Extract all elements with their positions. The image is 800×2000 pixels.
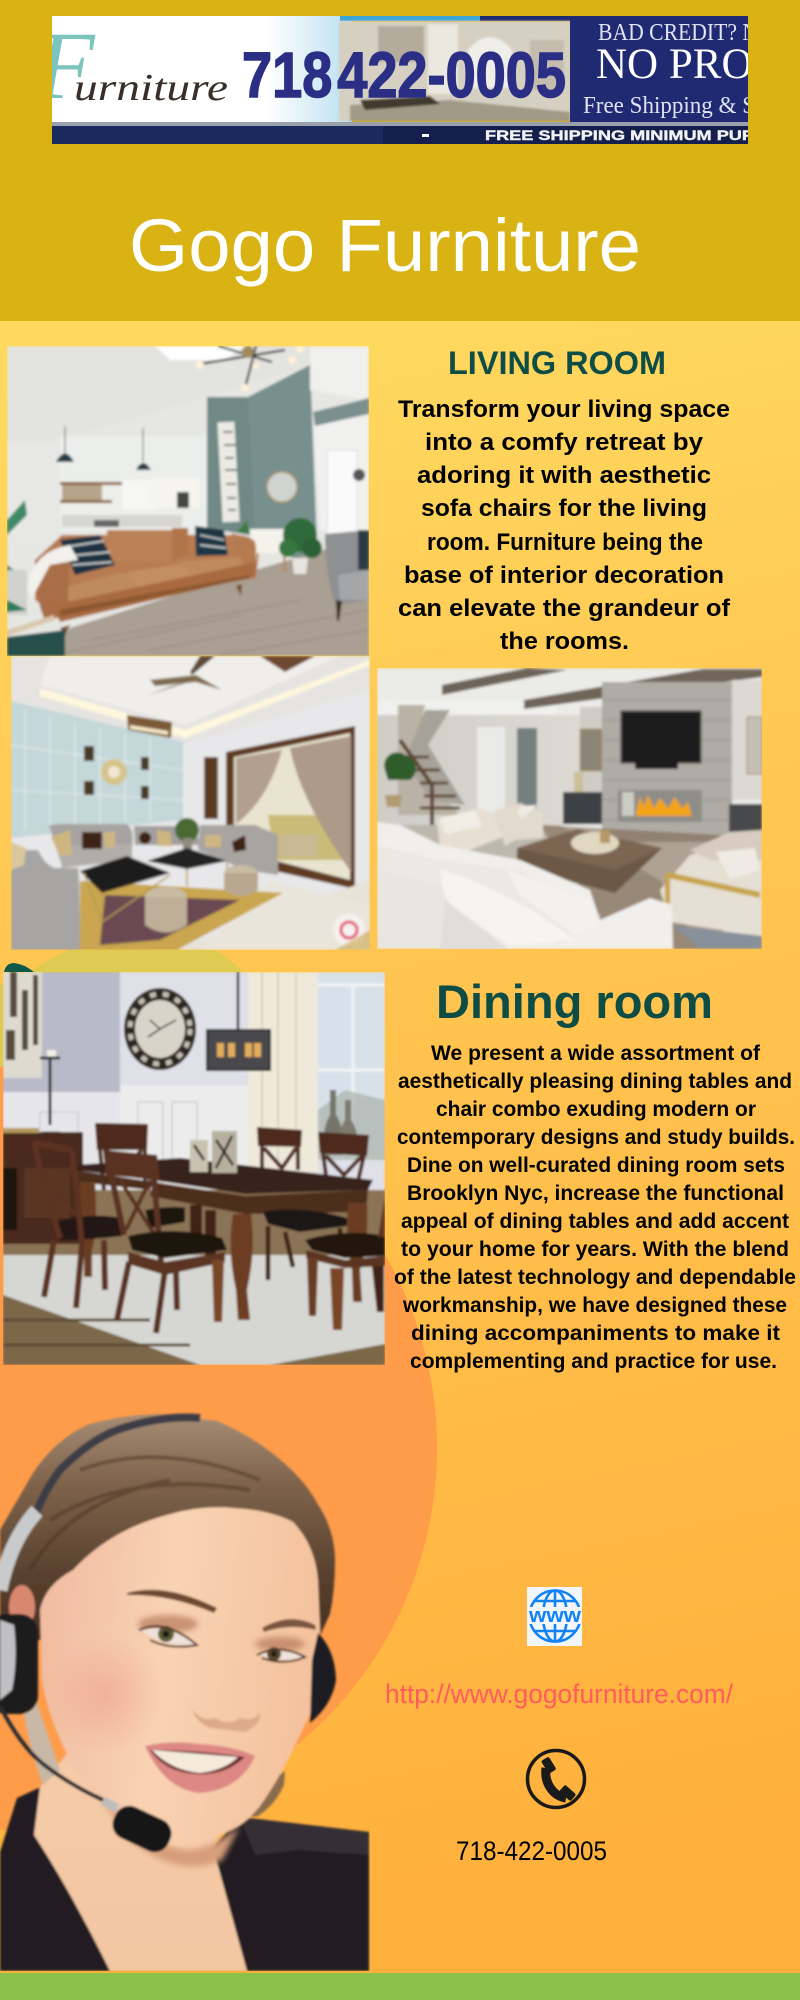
living room paragraph: can elevate the grandeur of <box>398 595 731 622</box>
banner ad <box>35 12 758 144</box>
under-chin shadow <box>106 1808 242 1869</box>
hair <box>0 1414 335 1640</box>
header band <box>0 0 800 321</box>
living room paragraph: sofa chairs for the living <box>421 495 707 522</box>
dining room paragraph: workmanship, we have designed these <box>402 1294 787 1317</box>
banner phone number: 718 422-0005 <box>242 39 566 111</box>
dining room paragraph: appeal of dining tables and add accent <box>401 1210 789 1233</box>
website link: http://www.gogofurniture.com/ <box>385 1679 733 1709</box>
living room paragraph: Transform your living space <box>398 396 730 423</box>
left ear cup <box>0 1614 38 1714</box>
living room paragraph: adoring it with aesthetic <box>417 462 711 489</box>
nose <box>192 1708 260 1732</box>
banner logo text <box>52 34 227 100</box>
right eye <box>257 1647 305 1662</box>
mouth <box>145 1742 255 1793</box>
decorative olive shape <box>0 950 243 1075</box>
banner offer text <box>584 24 748 118</box>
woman with headset <box>0 1414 369 1971</box>
left eyebrow <box>127 1590 217 1613</box>
dining room paragraph: We present a wide assortment of <box>431 1042 761 1065</box>
left side chair <box>34 1142 105 1308</box>
living room paragraph: the rooms. <box>500 628 629 655</box>
banner offer text: NO PRO <box>596 41 753 88</box>
dining room paragraph <box>394 1042 796 1373</box>
mic boom <box>0 1706 103 1800</box>
mic connector <box>101 1797 119 1812</box>
large orange circle <box>0 1063 437 1833</box>
dining room paragraph: complementing and practice for use. <box>410 1350 777 1373</box>
neck and chest <box>32 1754 249 1971</box>
face <box>40 1507 320 1848</box>
dining room paragraph: contemporary designs and study builds. <box>397 1126 795 1149</box>
table top <box>75 1158 373 1194</box>
dining room paragraph: aesthetically pleasing dining tables and <box>398 1070 792 1093</box>
living room heading: LIVING ROOM <box>448 345 666 381</box>
dining room paragraph: Dine on well-curated dining room sets <box>407 1154 785 1177</box>
headset band <box>12 1412 202 1532</box>
eye makeup <box>138 1615 305 1651</box>
living room paragraph: base of interior decoration <box>404 562 724 589</box>
footer band <box>0 1973 800 2000</box>
banner offer text: Free Shipping & S <box>583 93 755 119</box>
dining room paragraph: chair combo exuding modern or <box>436 1098 756 1121</box>
icon: www globe <box>527 1587 582 1646</box>
decorative dark green blob <box>4 963 34 972</box>
photo: living room with grey sofas <box>11 656 370 950</box>
dining room paragraph: Brooklyn Nyc, increase the functional <box>407 1182 784 1205</box>
far chairs <box>95 1123 369 1156</box>
photo: living room with fireplace <box>377 668 762 950</box>
jacket <box>0 1786 369 1971</box>
cheeks <box>70 1656 148 1735</box>
headset silver band <box>0 1511 37 1590</box>
right ear cup <box>310 1633 336 1723</box>
dining room paragraph: of the latest technology and dependable <box>394 1266 796 1289</box>
mic foam <box>108 1801 176 1857</box>
right eyebrow <box>262 1619 316 1632</box>
photo: living room with tan sofa <box>7 345 369 656</box>
ear <box>9 1585 35 1629</box>
left eye <box>139 1626 197 1647</box>
photo: dining room <box>3 972 385 1365</box>
living room paragraph <box>398 396 731 655</box>
phone number: 718-422-0005 <box>456 1836 607 1866</box>
banner room photo <box>339 21 571 121</box>
banner bottom strip <box>52 122 755 144</box>
dining room heading: Dining room <box>436 975 713 1028</box>
banner logo text: urniture <box>74 67 228 109</box>
icon: telephone <box>528 1750 584 1808</box>
front chair <box>103 1150 227 1333</box>
banner logo text: F <box>35 12 96 119</box>
banner bottom strip: FREE SHIPPING MINIMUM PUR <box>485 127 755 143</box>
banner navy block <box>570 16 748 122</box>
living room paragraph: into a comfy retreat by <box>425 429 704 456</box>
front right chair <box>305 1195 385 1330</box>
dining room paragraph: dining accompaniments to make it <box>411 1322 780 1345</box>
chair seats back row <box>263 1210 347 1232</box>
banner offer text: BAD CREDIT? N <box>598 20 758 46</box>
back hair at neck <box>23 1700 60 1785</box>
dining room paragraph: to your home for years. With the blend <box>401 1238 789 1261</box>
title: Gogo Furniture <box>129 204 641 287</box>
living room paragraph: room. Furniture being the <box>427 529 703 556</box>
icon: www globe: www <box>528 1605 581 1627</box>
